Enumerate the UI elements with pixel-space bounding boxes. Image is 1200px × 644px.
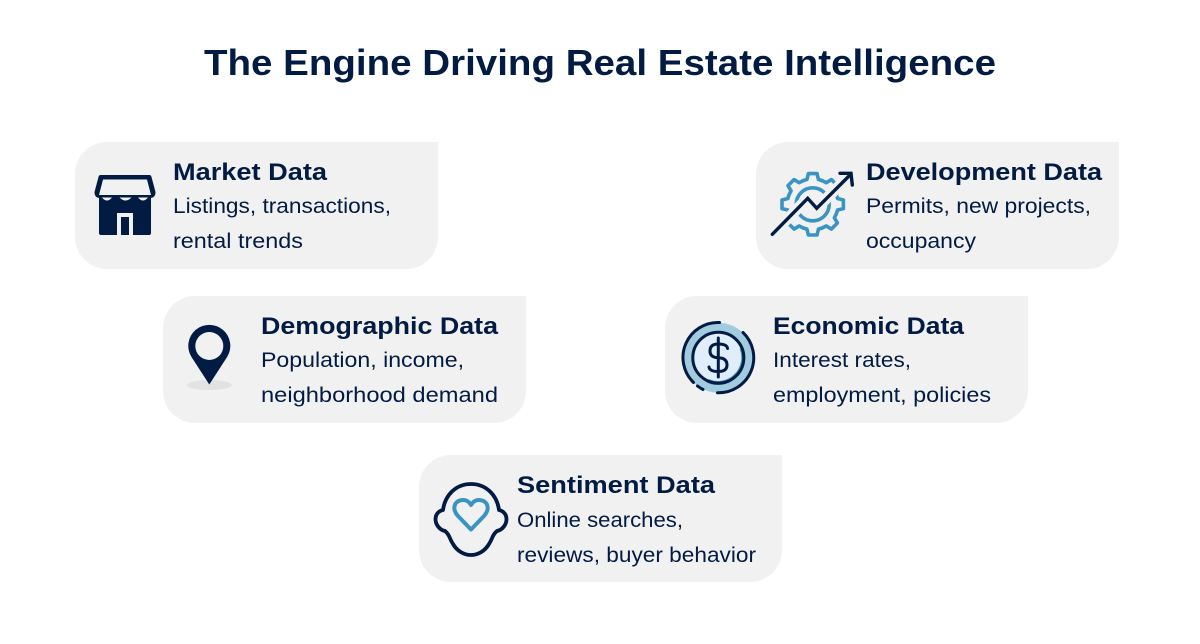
- panel: economic data: [665, 296, 1028, 423]
- panel: sentiment data: [419, 455, 782, 582]
- icon: map pin: [187, 325, 232, 390]
- text: sentiment data description: Online searches,: [517, 509, 683, 532]
- heading: economic data: Economic Data: [773, 313, 965, 340]
- heading: development data: Development Data: [866, 159, 1103, 186]
- text: economic data description: employment, policies: [773, 384, 991, 407]
- text: development data description: [866, 195, 1091, 253]
- heading: sentiment data: Sentiment Data: [517, 472, 716, 499]
- text: economic data description: [773, 349, 991, 407]
- icon: gear with rising arrow: [772, 173, 852, 235]
- text: market data description: rental trends: [173, 230, 303, 253]
- text: demographic data description: [261, 349, 498, 407]
- text: development data description: Permits, new projects,: [866, 195, 1091, 218]
- icon: storefront: [94, 175, 156, 235]
- title: The Engine Driving Real Estate Intelligence: [204, 42, 996, 83]
- text: demographic data description: Population, income,: [261, 349, 464, 372]
- text: market data description: Listings, transactions,: [173, 195, 391, 218]
- text: economic data description: Interest rates,: [773, 349, 911, 372]
- heading: demographic data: Demographic Data: [261, 313, 499, 340]
- text: sentiment data description: reviews, buyer behavior: [517, 544, 756, 567]
- icon: head with heart: [436, 484, 506, 555]
- icon: dollar coin: [683, 322, 754, 393]
- panel: development data: [756, 142, 1119, 269]
- text: demographic data description: neighborhood demand: [261, 384, 498, 407]
- panel: demographic data: [163, 296, 526, 423]
- text: sentiment data description: [517, 509, 756, 567]
- text: market data description: [173, 195, 391, 253]
- text: development data description: occupancy: [866, 230, 977, 253]
- panel: market data: [75, 142, 438, 269]
- heading: market data: Market Data: [173, 159, 328, 186]
